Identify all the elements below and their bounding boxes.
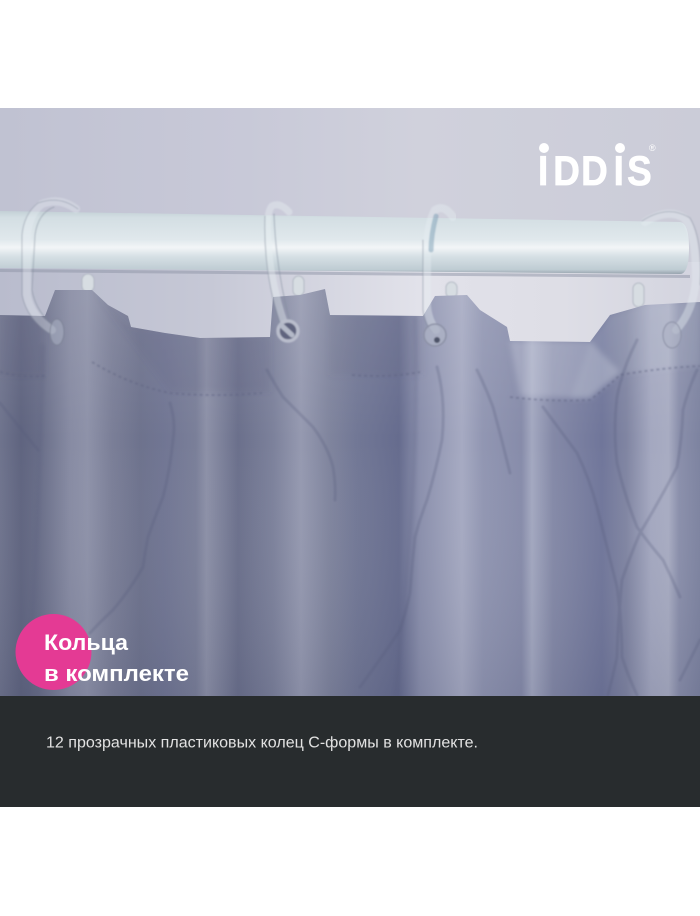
heading: Кольца <box>44 630 129 655</box>
wall below the rod <box>0 262 700 342</box>
curtain rod <box>0 211 690 278</box>
ring 4 <box>642 212 700 348</box>
caption text: 12 прозрачных пластиковых колец С-формы в комплекте. <box>46 734 478 752</box>
panel: product photo <box>0 108 700 696</box>
curtain fabric <box>0 280 700 696</box>
rod body <box>0 211 689 274</box>
ring 1 <box>22 200 78 345</box>
ring 1 eyelet <box>50 319 64 345</box>
logo: IDDIS: ® <box>649 143 656 153</box>
panel: dark caption band <box>0 696 700 807</box>
ring 2 <box>265 205 298 341</box>
fabric folds <box>0 280 700 696</box>
ring 3 eyelet <box>424 324 446 346</box>
rod shadow <box>0 269 690 278</box>
wavy fabric pattern lines <box>89 338 700 696</box>
ring 2 eyelet <box>278 321 298 341</box>
ring 4 eyelet <box>663 322 681 348</box>
soft fold edges <box>28 316 416 696</box>
ring 3 <box>423 208 453 346</box>
heading <box>44 630 189 686</box>
heading: в комплекте <box>44 661 189 686</box>
hooks behind the curtain <box>82 274 644 307</box>
hem stitching <box>0 362 700 401</box>
top hem band <box>510 306 698 400</box>
wall above the rod <box>0 108 700 268</box>
infographic canvas <box>0 108 700 807</box>
logo: IDDIS: IDDIS <box>538 148 652 195</box>
badge: pink circle <box>16 614 92 690</box>
